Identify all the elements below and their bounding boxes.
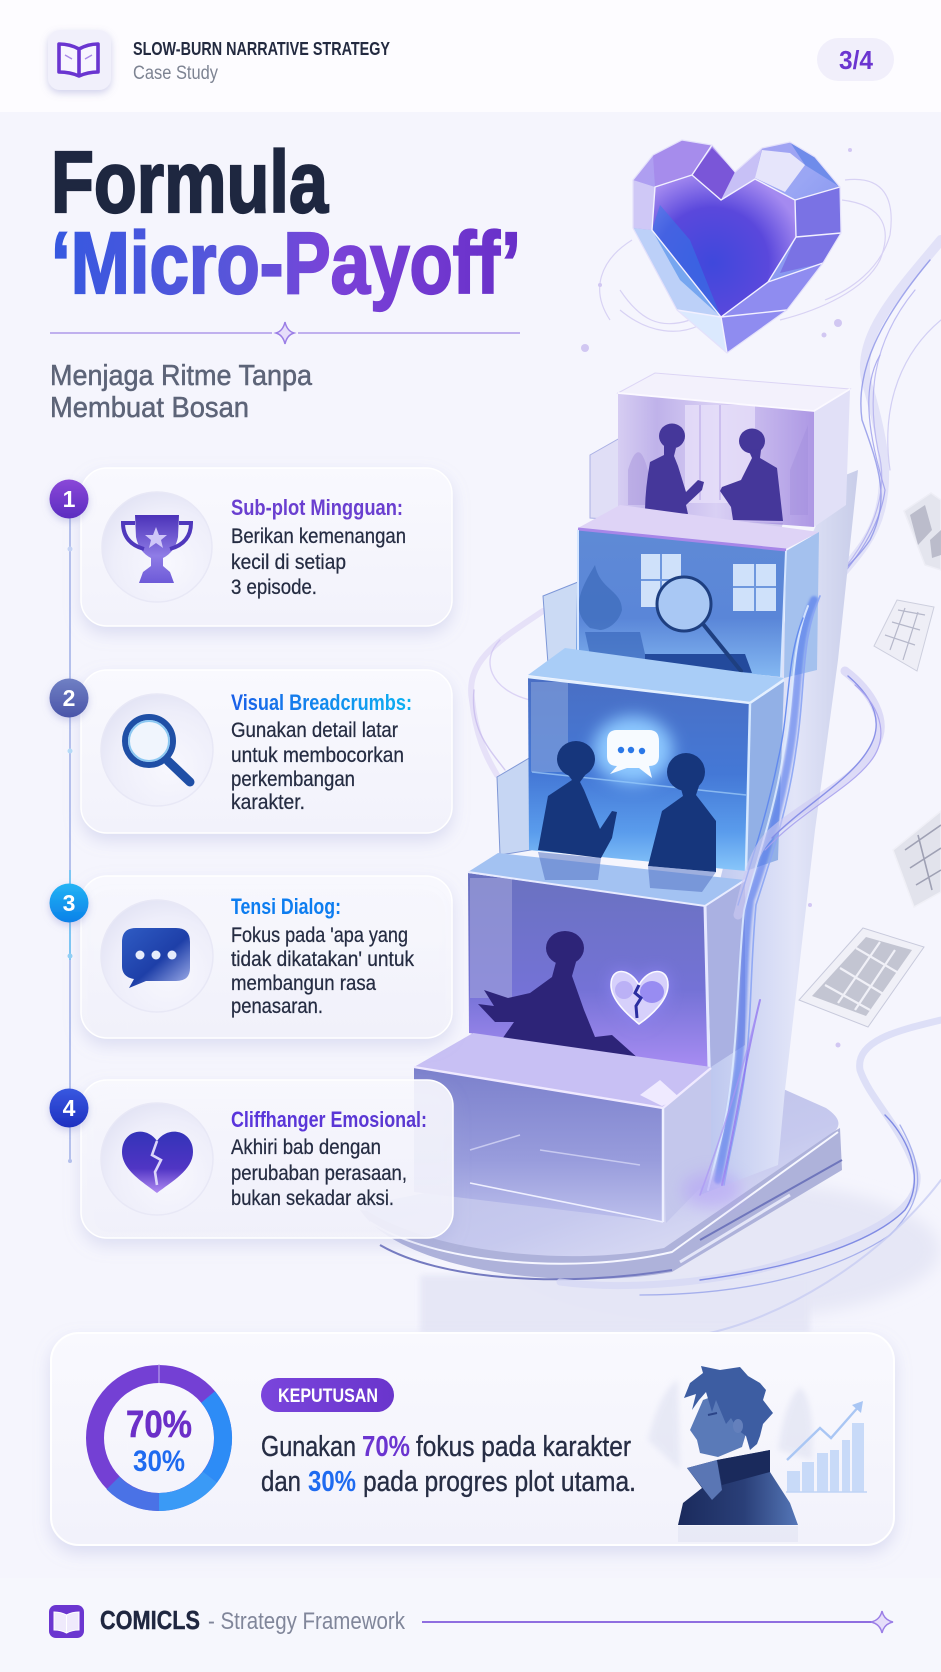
- decision text: 70%: [362, 1431, 410, 1463]
- card text 2: untuk membocorkan: [231, 744, 404, 767]
- stair 3: blue dialogue: [497, 677, 784, 872]
- badge: keputusan: [261, 1378, 394, 1412]
- decision text: pada progres plot utama.: [363, 1466, 636, 1498]
- card text 2: [231, 690, 412, 814]
- wispy rings: [600, 179, 891, 331]
- sparkle particles: [581, 148, 852, 1048]
- subtitle: Membuat Bosan: [50, 392, 249, 424]
- decision text: [261, 1431, 636, 1498]
- title: ‘Micro-Payoff’: [51, 215, 521, 312]
- donut labels: 70%: [126, 1404, 192, 1446]
- subtitle: Menjaga Ritme Tanpa: [50, 360, 313, 392]
- card text 4: Akhiri bab dengan: [231, 1136, 381, 1159]
- icon: open book: [48, 30, 111, 90]
- decision text: Gunakan: [261, 1431, 356, 1463]
- back glass column: [700, 470, 858, 1195]
- number badge 4: 4: [63, 1095, 76, 1121]
- card text 2: Visual Breadcrumbs:: [231, 690, 412, 715]
- title: Formula: [51, 134, 328, 231]
- subtitle: [50, 360, 313, 424]
- icon: magnifying glass: [101, 694, 213, 806]
- speech bubble: [593, 716, 673, 784]
- header band: [0, 0, 941, 112]
- card text 3: Fokus pada 'apa yang: [231, 924, 408, 947]
- card text 4: bukan sekadar aksi.: [231, 1187, 394, 1210]
- icon: speech bubble: [101, 900, 213, 1012]
- step card 4: [50, 1080, 453, 1238]
- floor 2: [528, 648, 784, 702]
- ground glow: [500, 1180, 940, 1320]
- face: [690, 1390, 750, 1457]
- card text 3: [231, 894, 414, 1018]
- page: center: [799, 928, 924, 1027]
- card text 4: [231, 1107, 427, 1210]
- page counter pill: [817, 38, 894, 81]
- silhouette: two characters talking: [645, 424, 783, 521]
- number badge 2: [50, 678, 88, 718]
- header subtitle: Case Study: [133, 63, 218, 84]
- card text 4: Cliffhanger Emosional:: [231, 1107, 427, 1132]
- footer band: [0, 1578, 941, 1672]
- manga pages: [799, 493, 941, 1027]
- card text 1: [231, 495, 406, 599]
- page: lower: [893, 811, 941, 907]
- badge: keputusan: KEPUTUSAN: [278, 1386, 378, 1407]
- number badge 2: 2: [63, 685, 75, 711]
- footer logo: [49, 1605, 84, 1638]
- donut chart 70/30: [95, 1364, 223, 1502]
- card text 1: Berikan kemenangan: [231, 525, 406, 548]
- fade below bust: [678, 1526, 798, 1542]
- donut labels: [126, 1404, 192, 1478]
- page counter pill: 3/4: [839, 45, 873, 75]
- character bust: [678, 1366, 798, 1542]
- magnifier: [657, 577, 741, 671]
- card text 1: 3 episode.: [231, 576, 317, 599]
- panel: decision: [51, 1333, 894, 1545]
- coat: [678, 1450, 798, 1525]
- hair: [684, 1366, 773, 1450]
- broken heart: [611, 971, 668, 1024]
- card text 2: perkembangan: [231, 768, 355, 791]
- platform reflection: [420, 1275, 810, 1333]
- number badge 4: [50, 1088, 88, 1128]
- desk: [585, 632, 750, 672]
- card text 1: kecil di setiap: [231, 551, 346, 574]
- card text 2: karakter.: [231, 791, 305, 814]
- plant: [579, 565, 622, 630]
- illustration: crystal staircase: [360, 140, 941, 1335]
- base water swirl: [560, 1020, 941, 1335]
- windows: [641, 554, 776, 611]
- number badge 3: 3: [63, 890, 75, 916]
- reflection under figures: [645, 514, 783, 540]
- floor 4: [414, 1033, 711, 1108]
- card text 3: membangun rasa: [231, 972, 376, 995]
- divider with star: [50, 322, 520, 344]
- header title: SLOW-BURN NARRATIVE STRATEGY: [133, 39, 390, 59]
- donut labels: 30%: [133, 1445, 185, 1478]
- floor 1: [578, 505, 819, 549]
- floor 3: [468, 853, 745, 906]
- background water wisps: [471, 240, 941, 775]
- brand name: COMICLS: [100, 1605, 200, 1635]
- timeline line: [68, 499, 72, 1163]
- card text 4: perubaban perasaan,: [231, 1162, 407, 1185]
- number badge 3: [50, 884, 88, 922]
- footer line with star: [422, 1611, 893, 1633]
- decision text: 30%: [308, 1466, 356, 1498]
- number badge 1: [50, 480, 88, 518]
- step card 3: [50, 876, 452, 1038]
- silhouette: character with flowing coat: [478, 931, 640, 1060]
- number badge 1: 1: [63, 486, 76, 512]
- decision text: dan: [261, 1466, 301, 1498]
- bar chart with trend arrow: [786, 1401, 867, 1492]
- stair 2: blue magnifier scene: [543, 529, 819, 678]
- stair 5: base step: [414, 1067, 711, 1223]
- card text 3: tidak dikatakan' untuk: [231, 948, 414, 971]
- faint background tree shapes: [648, 1380, 812, 1470]
- silhouette: two characters: [538, 741, 716, 872]
- card text 1: Sub-plot Mingguan:: [231, 495, 403, 520]
- icon: broken heart: [101, 1103, 213, 1215]
- icon: trophy: [102, 492, 212, 602]
- page: top: [904, 493, 941, 570]
- stair 1: purple conversation: [590, 373, 850, 540]
- card text 3: Tensi Dialog:: [231, 894, 341, 919]
- step card 1: [50, 468, 452, 626]
- platform: [360, 1088, 842, 1279]
- crystal heart: [600, 140, 891, 353]
- page: middle: [874, 600, 934, 671]
- foreground water stream: [682, 596, 881, 1208]
- step card 2: [50, 670, 452, 833]
- title: [51, 134, 521, 312]
- decision text: fokus pada karakter: [416, 1431, 631, 1463]
- card text 3: penasaran.: [231, 995, 323, 1018]
- card text 2: Gunakan detail latar: [231, 719, 398, 742]
- stair 4: broken heart scene: [468, 872, 745, 1067]
- footer tagline: - Strategy Framework: [208, 1608, 406, 1635]
